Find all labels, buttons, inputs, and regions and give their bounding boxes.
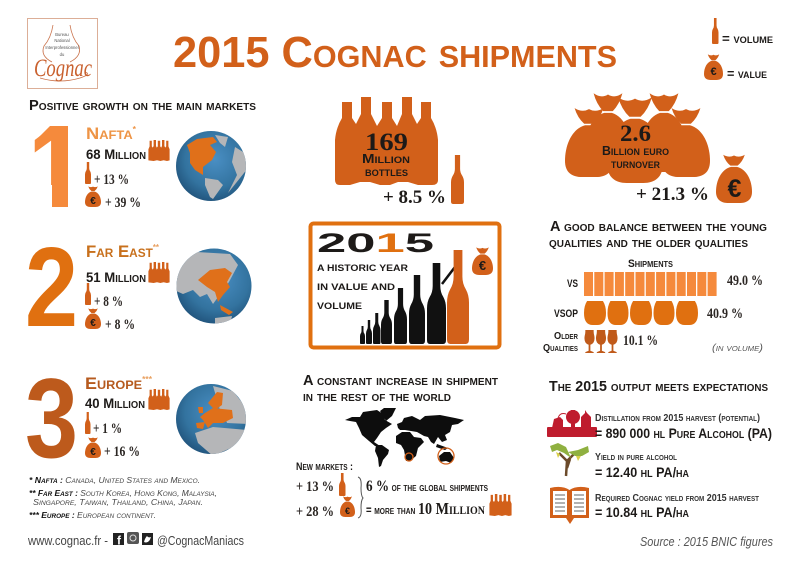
row: required yield [550,487,760,524]
icon: bottle [85,283,91,305]
total: = more than 10 Million [366,499,485,518]
icon: bag [85,186,101,207]
icon: bag: € [728,175,742,203]
panel: Nafta [34,126,246,207]
row: VSOP: 40.9 % [707,306,743,322]
legend: volume: = volume [722,31,773,46]
volume growth: + 13 % [296,479,334,495]
icon: twitter [142,533,153,545]
heading: balance: A good balance between the young [550,219,767,235]
panel: Far East [28,244,252,329]
row: VSOP [554,301,743,325]
heading: balance: qualities and the older qualities [549,235,748,251]
footnotes: Singapore, Taiwan, Thailand, China, Japan. [33,498,203,507]
icon: five bags [565,93,710,183]
region name: *** [142,375,153,384]
icon: bottle [339,473,346,496]
row: VS: VS [567,278,578,290]
share: 6 % of the global shipments [366,478,489,495]
heading: output: The 2015 output meets expectations [549,379,768,395]
heading: rest of the world: A constant increase in shipment [303,373,498,389]
icon: crate [148,262,170,283]
panel: historic year [310,224,500,348]
value growth: + 39 % [105,195,141,211]
icon: bag [716,155,752,203]
row: older qualities: Qualities [543,342,578,354]
row: yield [550,443,689,480]
stat: 2.6 [620,121,651,146]
icon: vine [550,443,589,476]
row: older qualities: 10.1 % [623,333,658,349]
icon: bag [85,308,101,329]
logo: Bureau National Interprofessionnel du Cognac: National [54,38,70,43]
icon: bag: € [90,447,96,458]
year: 20 1 5 [317,228,434,258]
growth: + 21.3 % [636,184,709,205]
legend [704,18,773,81]
footnotes: * Nafta : Canada, United States and Mexico. [29,476,200,485]
icon: bottle [85,162,91,184]
footer: website and social [27,532,244,548]
volume growth: + 8 % [94,294,123,310]
value growth: + 8 % [105,317,135,333]
volume: 68 Million [86,146,146,162]
footnotes: ** Far East : South Korea, Hong Kong, Malaysia, [29,489,217,498]
icon: bottle [85,412,90,434]
volume growth: + 1 % [93,421,122,437]
rank number 3: 3 [25,355,78,481]
icon: crate [489,494,512,516]
world map [345,408,464,467]
icon: bag [472,247,493,275]
chart: shipments by quality [543,258,763,354]
logo: Bureau National Interprofessionnel du Cognac [28,18,98,88]
icon: bag: € [90,196,96,207]
icon: distillery [547,410,597,437]
logo: Bureau National Interprofessionnel du Cognac: Interprofessionnel [45,45,79,50]
panel: Europe [27,376,246,458]
icon: bag [340,496,355,517]
row: older qualities: Older [554,330,578,342]
note: (in volume) [712,343,763,354]
row: VS [567,272,763,296]
row: VSOP: VSOP [554,308,578,320]
footnotes: *** Europe : European continent. [29,511,156,520]
globe: Europe [176,384,248,456]
region name: Far East [86,242,154,261]
stat label: turnover [611,157,660,171]
footer: website and social: www.cognac.fr - [27,534,108,548]
stat: = 10.84 hl PA/ha [595,504,689,520]
rank number 1: 1 [28,102,83,232]
logo: Bureau National Interprofessionnel du Cognac: Bureau [55,32,69,37]
volume: 51 Million [86,269,146,285]
legend: value [704,54,767,81]
source: Source : 2015 BNIC figures [640,535,773,549]
region name: Nafta [86,124,129,143]
panel: 169 million bottles [335,97,464,208]
region name: * [133,125,137,134]
volume: 40 Million [85,395,145,411]
region name: ** [153,243,160,252]
legend: value: € [710,66,717,78]
icon: facebook [113,533,124,548]
logo: Bureau National Interprofessionnel du Cognac: du [60,52,65,57]
panel: 2.6 billion euro turnover [565,93,752,205]
icon: facebook: f [117,534,122,548]
row: distillation [547,410,772,441]
stat: 169 [365,129,408,156]
row: VS: 49.0 % [727,273,763,289]
text: Yield in pure alcohol [595,452,678,463]
text: volume [317,297,362,312]
stat: = 12.40 hl PA/ha [595,464,689,480]
icon: book [550,487,589,524]
stat label: Billion euro [602,144,669,158]
text: Required Cognac yield from 2015 harvest [595,493,760,504]
growth: + 8.5 % [383,187,446,208]
stat: = 890 000 hl Pure Alcohol (PA) [595,425,772,441]
logo: Bureau National Interprofessionnel du Cognac: Cognac [34,55,92,82]
icon: crate [148,389,170,410]
volume growth: + 13 % [94,172,129,188]
globe: North America [176,131,248,201]
heading: positive growth: Positive growth on the main markets [29,98,256,114]
legend: value: = value [727,66,767,81]
label: New markets : [296,461,353,473]
icon: crate [148,140,170,161]
text: Distillation from 2015 harvest (potential) [595,413,760,424]
text: A historic year [317,259,409,274]
orange bottle [447,250,469,344]
panel: new markets [296,461,512,520]
icon: bag [85,437,101,458]
stat label: bottles [365,164,408,179]
icon: five bottles [335,97,438,185]
icon: bottle [451,155,464,204]
footnotes [29,476,217,520]
icon: bag: € [90,318,96,329]
value growth: + 16 % [104,444,140,460]
row: older qualities [543,330,658,354]
chart title: Shipments [628,258,674,270]
stat label: Million [362,152,410,166]
rank number 2: 2 [25,224,78,350]
text: in value and [317,278,396,293]
brace [358,477,363,518]
region name: Europe [85,374,139,393]
icon: bag: € [345,506,350,516]
title: 2015 Cognac shipments [173,28,617,77]
footer: website and social: @CognacManiacs [157,534,244,548]
icon: instagram [127,532,139,544]
globe: Asia [174,248,252,325]
rising bottles chart [360,263,458,344]
icon: bag: € [479,258,486,273]
value growth: + 28 % [296,504,334,520]
heading: balance [549,219,767,251]
heading: rest of the world [303,373,498,405]
heading: rest of the world: in the rest of the world [303,389,451,405]
